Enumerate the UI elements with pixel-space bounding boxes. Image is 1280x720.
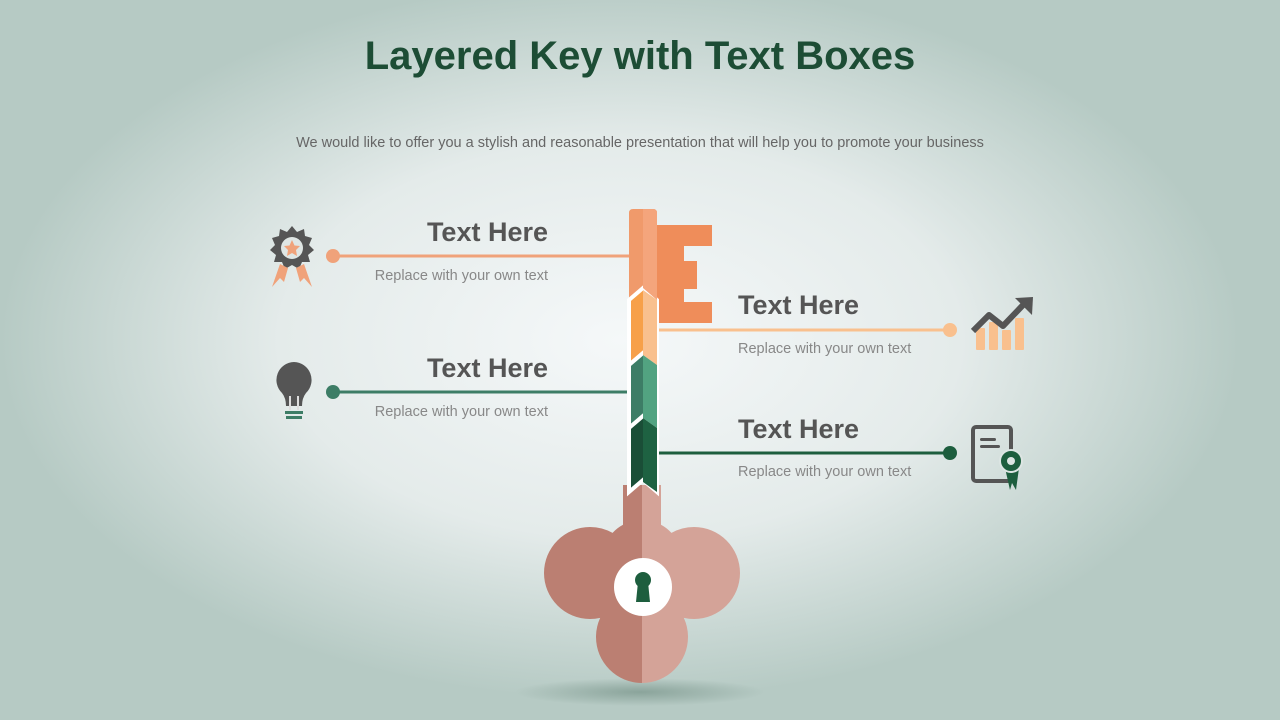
- key bit: [655, 225, 712, 323]
- text block: right 1: [738, 290, 912, 357]
- connector lines: [326, 249, 957, 460]
- key graphic: [270, 209, 1033, 704]
- key handle: [544, 485, 740, 683]
- icon: certificate: [973, 427, 1022, 490]
- text block: right 2: Text Here: [738, 414, 859, 444]
- keyhole: [614, 558, 672, 616]
- text block: right 1: Text Here: [738, 290, 859, 320]
- text block: left 2: Text Here: [427, 353, 548, 383]
- shaft segments: [629, 209, 657, 492]
- text block: left 1: Replace with your own text: [375, 268, 548, 284]
- text block: right 1: Replace with your own text: [738, 341, 911, 357]
- text block: right 2: Replace with your own text: [738, 464, 911, 480]
- text block: right 2: [738, 414, 912, 480]
- icon: growth chart: [973, 297, 1033, 350]
- icon: award: [270, 226, 314, 287]
- icon: lightbulb: [276, 362, 312, 419]
- shadow: [515, 678, 765, 706]
- subtitle: We would like to offer you a stylish and reasonable presentation that will help you to promote your business: [296, 135, 984, 151]
- text block: left 2: [375, 353, 548, 420]
- text block: left 2: Replace with your own text: [375, 404, 548, 420]
- title: Layered Key with Text Boxes: [365, 34, 915, 78]
- text block: left 1: [375, 217, 548, 284]
- text block: left 1: Text Here: [427, 217, 548, 247]
